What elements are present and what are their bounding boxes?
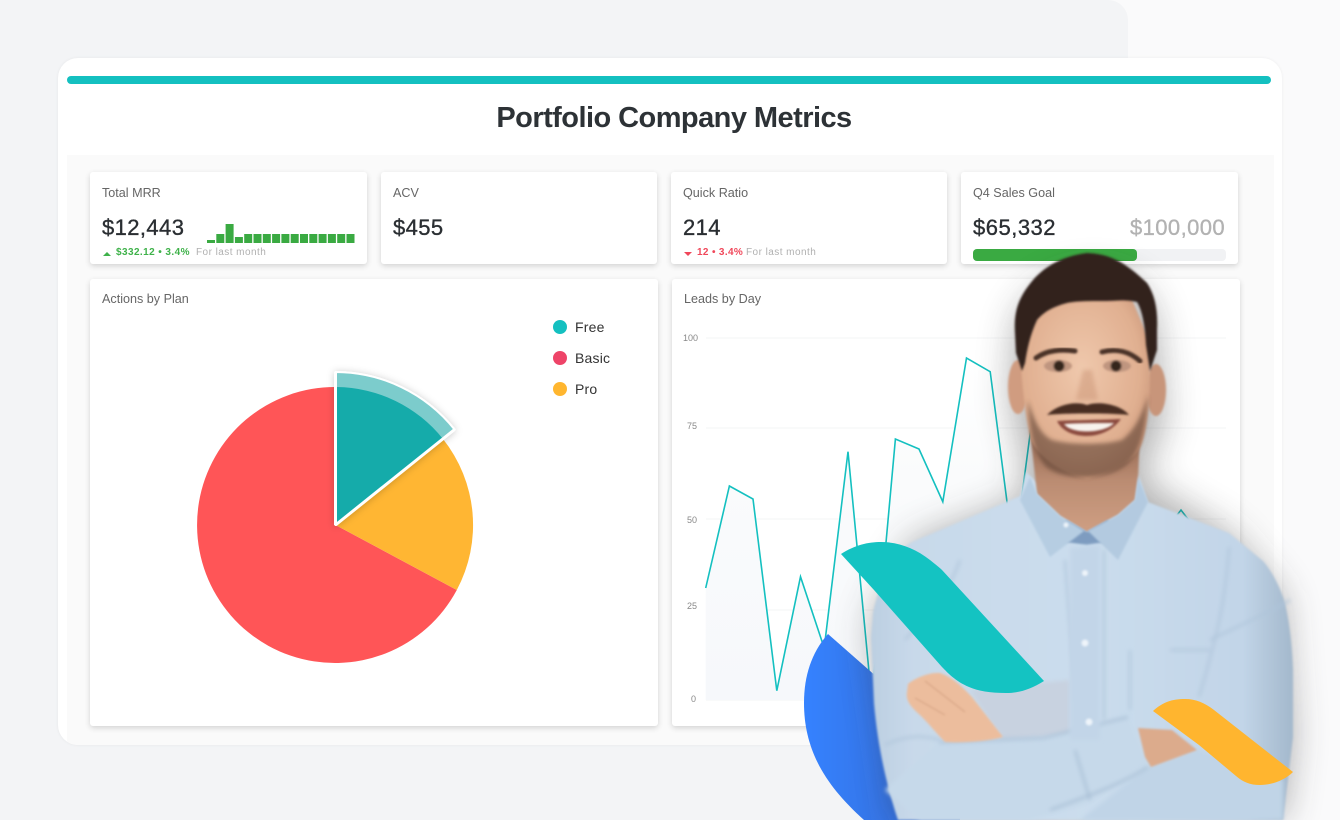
eyes [1044,360,1131,372]
line chart: 100 [683,333,698,343]
mini bar chart [207,224,354,243]
target value: $100,000 [1130,215,1225,240]
KPI card: Q4 Sales Goal [961,172,1238,264]
face [1021,295,1150,479]
down arrow [684,252,692,256]
person [871,253,1293,820]
teal leaf [841,542,1044,693]
legend text: basic: Basic [575,350,610,366]
shirt [871,472,1293,820]
value: 214 [683,215,721,240]
panel heading: Leads by Day [684,292,761,306]
folded forearm [885,717,1148,820]
ears [1008,360,1028,414]
main dashboard window [58,58,1282,745]
KPI card: ACV [381,172,657,264]
label: ACV [393,186,419,200]
panel: Actions by Plan [90,279,658,726]
period text: For last month [196,247,266,258]
beard [1028,395,1148,477]
change text: $332.12 • 3.4% [116,247,190,258]
blue leaf [804,634,960,820]
head [1008,253,1166,479]
label: Q4 Sales Goal [973,186,1055,200]
dashboard content area [67,155,1274,745]
up arrow [103,252,111,256]
right hand [1138,728,1197,767]
line chart: 25 [687,601,697,611]
panel heading: Actions by Plan [102,292,189,306]
value: $12,443 [102,215,184,240]
legend text: free: Free [575,319,605,335]
teeth [1064,423,1114,431]
title: Portfolio Company Metrics [496,102,852,134]
shaded fold under arm [970,680,1070,740]
KPI card: Total MRR [90,172,367,264]
line chart: 0 [691,694,696,704]
value: $65,332 [973,215,1056,240]
orange leaf [1153,699,1293,785]
moustache [1047,403,1129,415]
legend dot: basic [553,351,567,365]
nose shading [1076,370,1098,400]
eyebrows [1036,350,1140,361]
KPI card: Quick Ratio [671,172,947,264]
mouth [1057,419,1121,436]
hair [1015,253,1157,371]
line chart: 75 [687,421,697,431]
neck [1030,430,1140,532]
progress fill [973,249,1137,261]
panel: Leads by Day [672,279,1240,726]
legend text: pro: Pro [575,381,597,397]
progress bar [973,249,1226,261]
legend dot: free [553,320,567,334]
collar and placket [1020,477,1148,740]
change text: 12 • 3.4% [697,247,743,258]
label: Quick Ratio [683,186,748,200]
person shadow [871,274,1293,820]
period text: For last month [746,247,816,258]
value: $455 [393,215,444,240]
label: Total MRR [102,186,161,200]
teal header bar [67,76,1271,84]
line chart: 50 [687,515,697,525]
legend dot: pro [553,382,567,396]
left hand [907,673,1003,742]
legend [553,319,610,397]
